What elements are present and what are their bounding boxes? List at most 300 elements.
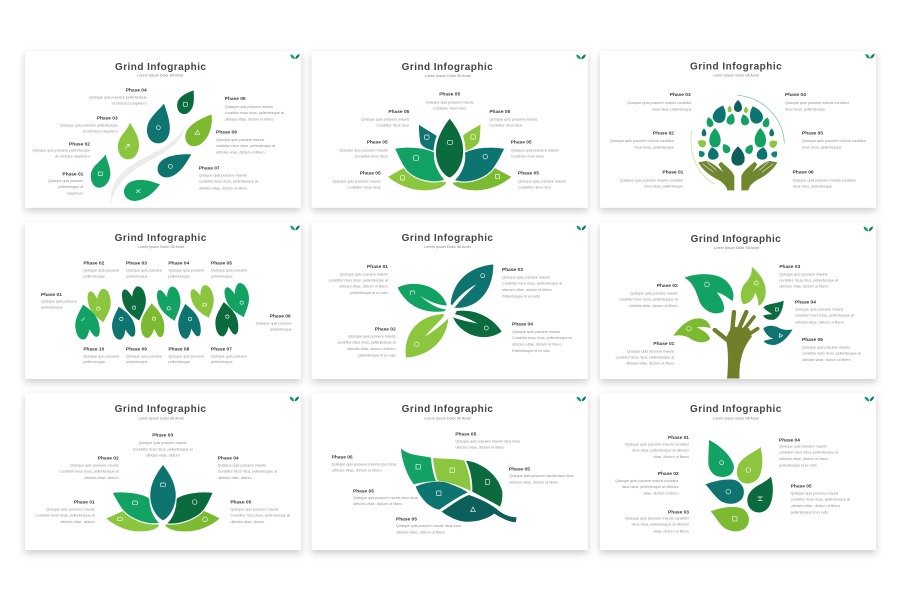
text: phase 07: [211, 347, 247, 364]
text: phase 06: Phase 06: [270, 314, 291, 320]
text: phase 02: [610, 131, 675, 149]
title: Grind Infographic: [402, 62, 493, 73]
subtitle: Lorem Ipsum Dolor Sit Amet: [138, 416, 184, 420]
subtitle: Lorem Ipsum Dolor Sit Amet: [714, 246, 759, 250]
leaf: phase 08: [141, 303, 164, 338]
text: phase 04: ultricies vitae, dictum: [218, 476, 252, 480]
text: phase 01: Phase 01: [367, 264, 388, 270]
text: phase 02: Phase 02: [375, 326, 396, 332]
text: phase 09: [126, 347, 162, 364]
text: phase 06: Phase 06: [216, 130, 237, 136]
leaf: phase 03: [741, 267, 766, 306]
leaf: phase 01: [91, 154, 110, 188]
text: phase 01: idapibero: [67, 192, 83, 196]
text: phase 04: [512, 322, 573, 353]
leaf: phase 09: [109, 305, 137, 341]
text: upper right phase: Phase 05: [489, 109, 511, 115]
text: phase 03: pellentesque: [126, 274, 148, 278]
text: phase 06: Phase 06: [793, 170, 814, 176]
text: phase 06: pellentesque: [270, 328, 292, 332]
text: phase 04: Quisque quis posuere mauris: [779, 444, 827, 448]
text: phase 01: [616, 341, 675, 366]
text: phase 04: Quisque quis posuere mauris: [512, 330, 560, 334]
text: phase 02: Quisque quis posuere mauris: [70, 463, 119, 467]
text: phase 02: Quisque quis posuere mauris: [630, 291, 678, 295]
subtitle: Lorem Ipsum Dolor Sit Amet: [137, 74, 183, 78]
panel: branch of seven leaves: [25, 51, 301, 208]
title: Grind Infographic: [691, 234, 781, 245]
text: phase 02: [619, 283, 679, 308]
text: phase 01: curabitur risus risus, pellentesque at: [329, 278, 389, 282]
text: phase 04: Phase 04: [168, 260, 190, 266]
text: phase 03: ultricies vitae, dictum ut libero: [502, 288, 552, 292]
text: phase 01: [625, 435, 690, 459]
leaf: phase 02: [86, 288, 114, 324]
text: phase 01: risus risus, pellentesque at ultricies: [632, 448, 689, 452]
text: upper left phase: Quisque quis posuere mauris: [361, 117, 409, 121]
leaf: phase 07: [175, 302, 202, 340]
leaf: phase 04: [453, 311, 502, 337]
text: phase 05: Quisque quis posuere: [211, 268, 247, 272]
icon: left hand: [698, 161, 734, 190]
text: phase 02: [32, 141, 90, 159]
text: phase 04: [779, 437, 839, 467]
text: phase 05: Quisque quis posuere mauris: [225, 105, 273, 109]
text: phase 03: curabitur risus risus, pellentesque at: [779, 278, 839, 282]
text: phase 05: Phase 05: [802, 131, 823, 137]
text: phase 05: [230, 499, 291, 524]
text: phase 02: pellentesque: [83, 274, 105, 278]
text: phase 04: Phase 04: [779, 437, 800, 443]
subtitle: Lorem Ipsum Dolor Sit Amet: [424, 416, 471, 420]
text: middle right phase: Quisque quis posuere mauris: [511, 148, 559, 152]
leaf: bottom: [124, 180, 160, 201]
text: phase 03: [502, 267, 563, 298]
text: phase 01: Quisque quis posuere mauris: [340, 272, 388, 276]
text: lower left phase: Curabitur risus risus: [347, 186, 381, 190]
leaf: phase 03: [711, 507, 749, 531]
leaf: phase 04: [737, 447, 762, 484]
leaf: phase 02: [118, 122, 139, 159]
card background: [312, 51, 588, 208]
text: phase 02: Phase 02: [653, 131, 674, 137]
text: phase 01: Quisque quis posuere: [48, 179, 83, 183]
text: phase 05: Quisque quis posuere mauris: [791, 491, 838, 495]
text: phase 02: Phase 02: [83, 260, 105, 266]
text: right phase: Phase 05: [509, 467, 530, 473]
text: phase 03: Curabitur risus risus, pellentesque at: [502, 281, 563, 285]
text: phase 03: Phase 03: [502, 267, 523, 273]
text: middle left phase: ultricies vitae, dictum ut libero: [353, 502, 402, 506]
leaf segment: tip: [401, 448, 436, 484]
text: bottom phase: [396, 517, 461, 534]
leaf segment: upper middle: [433, 458, 471, 491]
text: phase 05: ultricies vitae, dictum ut libero: [802, 358, 851, 362]
text: upper left phase: Curabitur risus risus: [376, 124, 409, 128]
leaf: phase 01: [673, 318, 711, 342]
text: phase 06: [216, 130, 276, 155]
text: lower left phase: Phase 05: [360, 171, 381, 177]
text: lower right phase: Phase 05: [518, 171, 539, 177]
text: phase 03: Phase 03: [668, 509, 689, 515]
panel: segmented leaf: [312, 393, 588, 550]
text: phase 07: Phase 07: [211, 347, 232, 353]
text: phase 03: [625, 509, 690, 533]
text: phase 06: curabitur risus risus, pellentesque at: [216, 144, 276, 148]
text: phase 07: Phase 07: [199, 165, 220, 171]
text: top phase: [426, 92, 474, 111]
text: phase 08: Quisque quis posuere: [168, 354, 204, 358]
text: phase 04: Quisque quis posuere pellentesque: [89, 95, 147, 99]
leaf segment: upper right: [466, 461, 502, 507]
text: phase 06: Quisque quis posuere mauris: [216, 138, 264, 142]
panel: five-petal lotus: [25, 393, 301, 550]
text: right phase: ultricies vitae, dictum ut libero: [509, 480, 558, 484]
text: phase 05: Curabitur risus risus, pellentesque at: [230, 513, 291, 517]
text: phase 05: Phase 05: [230, 499, 252, 505]
text: middle left phase: Phase 05: [353, 489, 374, 495]
text: phase 04: Phase 04: [512, 322, 533, 328]
icon: logo: [290, 54, 300, 59]
petal: phase 05: [164, 510, 221, 532]
text: upper right phase: Quisque quis posuere mauris: [489, 117, 537, 121]
title: Grind Infographic: [402, 404, 493, 415]
text: phase 01: Curabitur risus risus, pellentesque at: [35, 513, 96, 517]
text: phase 01: risus risus, pellentesque: [644, 185, 683, 189]
petal: middle left: [394, 147, 445, 182]
text: phase 02: Phase 02: [69, 141, 90, 147]
text: phase 08: Phase 08: [168, 347, 190, 353]
text: phase 10: Quisque quis posuere: [83, 354, 119, 358]
text: bottom phase: Quisque quis posuere mauris risus risus: [396, 524, 461, 528]
text: phase 05: [802, 337, 862, 362]
subtitle: Lorem Ipsum Dolor Sit Amet: [713, 416, 759, 420]
arrow: left arc: [691, 130, 715, 184]
text: middle right phase: Curabitur risus risus: [511, 155, 544, 159]
text: phase 05: Phase 05: [802, 337, 823, 343]
text: phase 01: Phase 01: [62, 172, 84, 178]
text: phase 01: Quisque quis posuere mauris: [627, 349, 674, 353]
icon: logo: [865, 396, 874, 401]
text: phase 01: pellentesque: [41, 306, 63, 310]
title: Grind Infographic: [402, 233, 493, 244]
icon: logo: [865, 54, 875, 59]
text: phase 05: ultricies vitae, dictum ut libero: [225, 117, 273, 121]
text: phase 03: ultricies vitae, dictum: [146, 454, 180, 458]
leaf: phase 07: [158, 154, 191, 177]
subtitle: Lorem Ipsum Dolor Sit Amet: [713, 73, 759, 77]
text: lower left phase: Quisque quis posuere mauris: [332, 179, 381, 183]
text: phase 05: risus risus, pellentesque: [802, 145, 842, 149]
text: middle right phase: [511, 140, 559, 159]
icon: hand trunk: [715, 312, 758, 378]
panel: four-leaf pinwheel: [312, 223, 588, 379]
text: lower left phase: [332, 171, 381, 190]
card background: [25, 223, 301, 379]
text: phase 05: Quisque quis posuere mauris curabitur: [802, 139, 867, 143]
text: middle left phase: [353, 489, 418, 506]
leaf: phase 03: [147, 104, 170, 143]
leaf segment: lower middle: [416, 482, 468, 510]
icon: logo: [577, 396, 586, 401]
card background: [25, 51, 301, 208]
title: Grind Infographic: [115, 233, 207, 244]
text: middle left phase: Curabitur risus risus: [355, 155, 388, 159]
text: phase 03: Quisque quis posuere mauris curabitur: [625, 517, 690, 521]
panel: five teardrop leaves: [600, 393, 876, 550]
tree canopy leaves: [696, 100, 779, 166]
text: phase 01: Quisque quis posuere mauris: [46, 507, 95, 511]
text: phase 10: pellentesque: [83, 360, 105, 364]
text: phase 03: Quisque quis posuere: [126, 268, 162, 272]
petal: back right: [462, 124, 481, 152]
icon: logo: [290, 396, 299, 401]
text: phase 01: Quisque quis posuere mauris curabitur: [625, 442, 690, 446]
text: phase 05: Phase 05: [791, 484, 812, 490]
text: lower right phase: Curabitur risus risus: [518, 186, 551, 190]
subtitle: Lorem Ipsum Dolor Sit Amet: [424, 245, 471, 249]
text: phase 04: ultricies vitae, dictum ut libero: [512, 343, 562, 347]
text: lower right phase: [518, 171, 566, 190]
petal: bottom right: [452, 167, 512, 191]
text: phase 07: pellentesque: [211, 360, 233, 364]
text: right phase: [509, 467, 574, 484]
leaf: phase 02: [705, 479, 744, 504]
text: phase 02: ultricies vitae, dictum: [84, 476, 119, 480]
text: phase 03: at ultricies idapibero: [83, 130, 118, 134]
petal: middle right: [454, 147, 505, 182]
text: phase 01: Phase 01: [41, 292, 62, 298]
text: middle left phase: Phase 05: [367, 140, 388, 146]
text: top phase: Quisque quis posuere mauris: [426, 101, 474, 105]
text: phase 03: Quisque quis posuere mauris: [502, 275, 550, 279]
leaf: phase 10: [72, 303, 101, 341]
text: phase 04: Phase 04: [785, 92, 806, 98]
text: upper left phase: [361, 109, 410, 128]
leaf: phase 06: [223, 282, 254, 320]
title: Grind Infographic: [690, 61, 782, 72]
panel: tree of leaves held by hands: [600, 51, 876, 208]
text: phase 03: [133, 433, 194, 458]
text: phase 08: pellentesque: [168, 360, 190, 364]
text: phase 04: [168, 260, 204, 278]
text: phase 03: [779, 264, 839, 289]
text: phase 03: Quisque quis posuere mauris: [138, 441, 187, 445]
text: bottom phase: ultricies vitae, dictum ut libero: [396, 530, 445, 534]
text: phase 03: ultricies vitae, dictum ut libero: [779, 285, 828, 289]
text: phase 04: pellentesque id ex odio: [779, 463, 817, 467]
text: left phase: [332, 455, 397, 472]
text: phase 01: pellentesque at: [58, 185, 84, 189]
text: phase 06: risus risus, pellentesque: [793, 185, 832, 189]
text: phase 05: Quisque quis posuere mauris: [230, 507, 279, 511]
text: phase 02: [337, 326, 397, 357]
leaf: phase 05: [189, 284, 219, 321]
text: phase 02: risus risus, pellentesque: [634, 145, 674, 149]
text: right phase: Quisque quis posuere mauris risus risus: [509, 474, 574, 478]
text: phase 06: [793, 170, 857, 189]
text: phase 03: Phase 03: [670, 92, 691, 98]
petal: phase 04: [166, 492, 213, 524]
text: phase 02: [59, 455, 120, 480]
text: phase 02: Curabitur risus risus, pellentesque at: [59, 469, 120, 473]
text: top phase: Phase 05: [439, 92, 460, 98]
text: phase 10: [83, 347, 119, 364]
panel: hand tree: [600, 223, 876, 379]
leaf segment: base with stem: [442, 495, 517, 522]
text: phase 05: ultricies vitae, dictum ut libero: [791, 504, 840, 508]
text: phase 02: [615, 471, 679, 496]
petal: centre: [435, 118, 464, 178]
text: phase 05: curabitur risus risus, pellentesque at: [802, 351, 862, 355]
text: phase 03: [627, 92, 692, 111]
text: phase 04: Phase 04: [126, 88, 147, 94]
icon: logo: [577, 225, 586, 230]
text: phase 04: Curabitur risus risus, pellentesque at: [218, 469, 278, 473]
text: phase 05: curabitur risus risus, pellentesque at: [791, 497, 851, 501]
text: phase 05: [791, 484, 851, 514]
title: Grind Infographic: [690, 404, 782, 415]
text: phase 02: Quisque quis posuere mauris curabitur: [615, 479, 679, 483]
branch stem: [111, 125, 185, 204]
text: phase 01: ultricies vitae, dictum: [60, 520, 95, 524]
title: Grind Infographic: [115, 62, 206, 73]
text: middle left phase: Quisque quis posuere mauris: [339, 148, 388, 152]
text: phase 01: Quisque quis posuere: [41, 300, 77, 304]
text: phase 10: Phase 10: [83, 347, 105, 353]
text: phase 02: curabitur risus risus, pellentesque at: [619, 297, 679, 301]
text: phase 03: Phase 03: [97, 116, 118, 122]
text: phase 05: ultricies vitae, dictum: [230, 520, 264, 524]
leaf: phase 05: [763, 326, 793, 345]
leaf: phase 03: [451, 264, 493, 308]
petal: phase 01: [105, 510, 160, 532]
text: phase 05: [802, 131, 867, 149]
leaf: phase 06: [185, 114, 212, 146]
text: phase 04: [89, 88, 147, 105]
text: phase 01: ultricies vitae, dictum ut libero: [339, 285, 388, 289]
title: Grind Infographic: [115, 404, 206, 415]
text: phase 02: curabitur risus risus, pellentesque at: [337, 341, 397, 345]
text: phase 03: Pellentesque id ex odio: [502, 294, 540, 298]
icon: right hand: [741, 161, 777, 190]
text: phase 04: Pellentesque id ex odio: [512, 349, 550, 353]
text: phase 03: Quisque quis posuere mauris curabitur: [627, 101, 692, 105]
subtitle: Lorem Ipsum Dolor Sit Amet: [138, 245, 184, 249]
text: top phase: Quisque quis posuere mauris risus risus: [455, 439, 520, 443]
text: phase 09: Phase 09: [126, 347, 147, 353]
text: phase 03: [60, 116, 118, 134]
text: phase 02: ultricies vitae, dictum ut libero: [347, 347, 396, 351]
text: upper right phase: Curabitur risus risus: [489, 124, 522, 128]
text: bottom phase: Phase 05: [396, 517, 417, 523]
card background: [25, 393, 301, 550]
text: top phase: ultricies vitae, dictum ut libero: [455, 445, 504, 449]
text: middle left phase: Quisque quis posuere mauris risus risus: [353, 496, 418, 500]
text: phase 02: vitae, dictum ut libero: [643, 492, 679, 496]
text: phase 04: Curabitur risus risus, pellentesque at: [512, 336, 573, 340]
card background: [312, 393, 588, 550]
leaf: phase 04: [155, 285, 185, 323]
text: phase 09: pellentesque: [126, 360, 148, 364]
text: phase 01: [329, 264, 389, 295]
text: phase 02: Quisque quis posuere pellentesque: [32, 149, 90, 153]
text: phase 03: Quisque quis posuere pellentesque: [60, 124, 118, 128]
text: phase 04: ultricies vitae, dictum ut libero: [779, 457, 828, 461]
leaf: phase 01: [398, 284, 447, 312]
text: phase 04: Quisque quis posuere mauris: [795, 308, 843, 312]
text: phase 03: Curabitur risus risus, pellentesque at: [133, 447, 194, 451]
text: phase 03: vitae, dictum ut libero: [653, 529, 689, 533]
leaf: phase 03: [121, 285, 149, 323]
text: left phase: ultricies vitae, dictum ut libero: [332, 468, 382, 472]
text: phase 04: curabitur risus risus, pellentesque at: [779, 450, 839, 454]
text: phase 02: [83, 260, 119, 278]
petal: back left: [418, 124, 437, 152]
card background: [312, 223, 588, 379]
text: phase 01: pellentesque id ex odio: [350, 291, 388, 295]
text: phase 05: [225, 96, 285, 121]
text: phase 02: at ultricies idapibero: [55, 155, 90, 159]
text: upper right phase: [489, 109, 537, 128]
subtitle: Lorem Ipsum Dolor Sit Amet: [425, 74, 471, 78]
icon: logo: [864, 226, 873, 231]
leaf: phase 02: [684, 274, 734, 313]
text: phase 02: Phase 02: [658, 471, 679, 477]
text: phase 04: Quisque quis posuere mauris: [218, 463, 266, 467]
text: phase 01: [48, 172, 84, 196]
text: phase 04: [795, 299, 855, 324]
petal: bottom left: [387, 167, 447, 191]
leaf: phase 04: [763, 301, 784, 320]
text: phase 05: curabitur risus risus, pellentesque at: [225, 111, 285, 115]
text: phase 07: [199, 165, 259, 190]
text: phase 01: [620, 170, 684, 189]
text: phase 05: pellentesque id ex odio: [791, 510, 828, 514]
text: phase 01: Phase 01: [668, 435, 689, 441]
text: phase 02: Quisque quis posuere mauris curabitur: [610, 139, 675, 143]
text: phase 03: [126, 260, 162, 278]
text: phase 01: curabitur risus risus, pellentesque at: [616, 355, 675, 359]
text: phase 01: Phase 01: [662, 170, 684, 176]
text: left phase: Quisque quis posuere mauris risus risus: [332, 462, 397, 466]
leaf: phase 02: [406, 314, 448, 358]
text: phase 08: [168, 347, 204, 364]
text: phase 05: Quisque quis posuere mauris: [802, 345, 850, 349]
text: top phase: Curabitur risus risus: [433, 107, 466, 111]
icon: logo: [290, 225, 300, 230]
text: phase 01: [41, 292, 77, 310]
text: left phase: Phase 05: [332, 455, 353, 461]
text: phase 05: pellentesque: [211, 274, 233, 278]
leaf: phase 04: [177, 90, 194, 114]
text: phase 04: Phase 04: [795, 299, 816, 305]
text: lower right phase: Quisque quis posuere mauris: [518, 179, 566, 183]
panel: seven-petal lotus: [312, 51, 588, 208]
text: phase 02: Phase 02: [657, 283, 678, 289]
text: phase 02: Quisque quis posuere mauris: [348, 335, 396, 339]
text: phase 04: Quisque quis posuere mauris curabitur: [785, 101, 850, 105]
text: phase 07: ultricies vitae, dictum ut libero: [199, 186, 247, 190]
text: phase 07: curabitur risus risus, pellentesque at: [199, 180, 259, 184]
text: phase 04: Phase 04: [218, 455, 239, 461]
text: phase 05: Phase 05: [211, 260, 232, 266]
text: phase 06: Quisque quis posuere mauris curabitur: [793, 178, 857, 182]
text: phase 03: Phase 03: [126, 260, 147, 266]
text: phase 02: Phase 02: [98, 455, 119, 461]
text: phase 01: Phase 01: [653, 341, 675, 347]
text: top phase: Phase 05: [455, 432, 477, 438]
